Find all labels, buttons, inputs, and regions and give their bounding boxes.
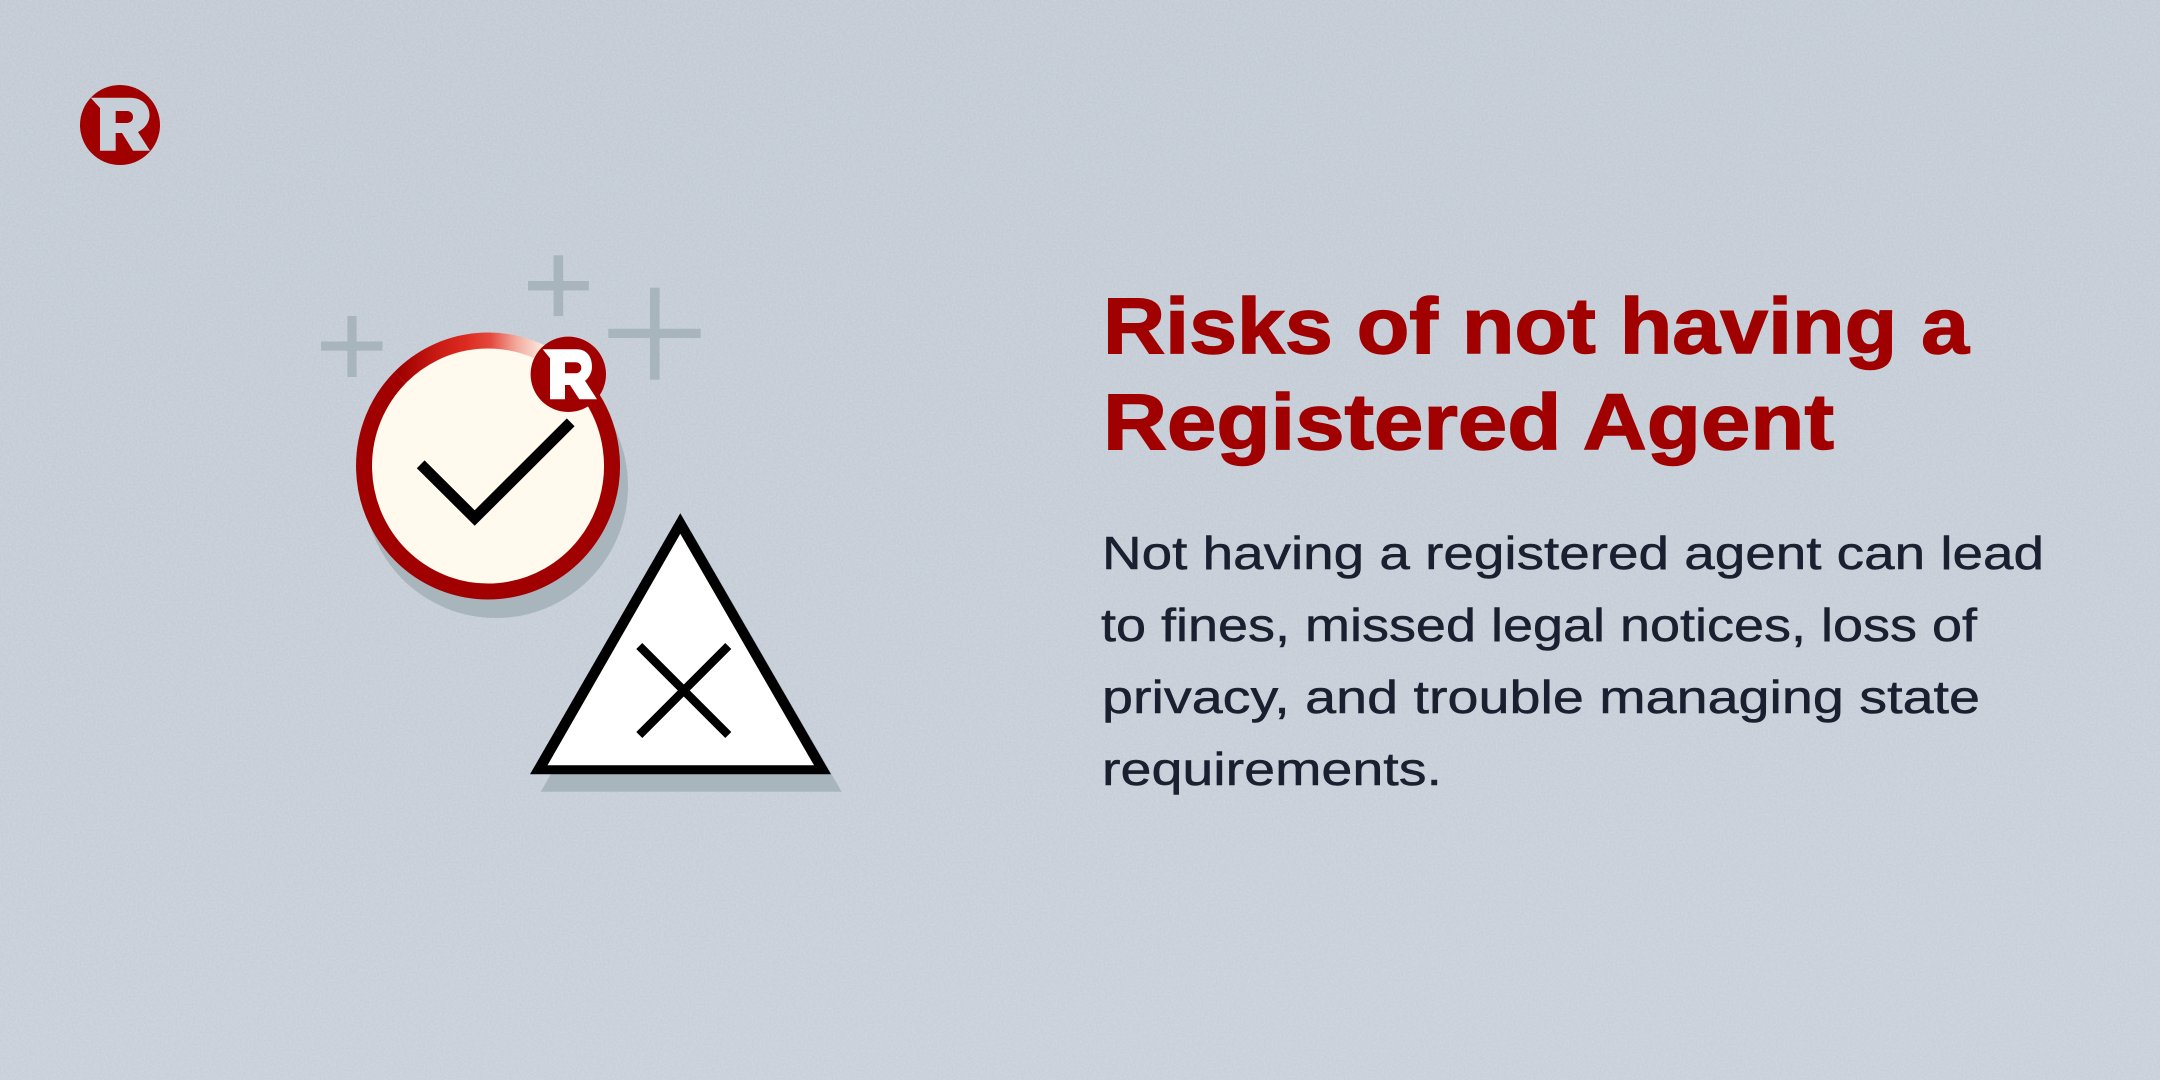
body text: to fines, missed legal notices, loss of: [1101, 599, 1977, 651]
heading: Risks of not having a: [1103, 281, 1970, 370]
body text: [1101, 527, 2044, 795]
heading: Registered Agent: [1103, 377, 1834, 466]
body text: requirements.: [1102, 743, 1442, 795]
icon: check mark circle: [364, 337, 628, 618]
icon: warning triangle with X: [530, 513, 842, 792]
heading: [1103, 281, 1970, 466]
body text: Not having a registered agent can lead: [1102, 527, 2044, 579]
logo: R badge top left: [80, 85, 160, 165]
icon: decorative plus signs: [321, 255, 701, 380]
body text: privacy, and trouble managing state: [1102, 671, 1980, 723]
